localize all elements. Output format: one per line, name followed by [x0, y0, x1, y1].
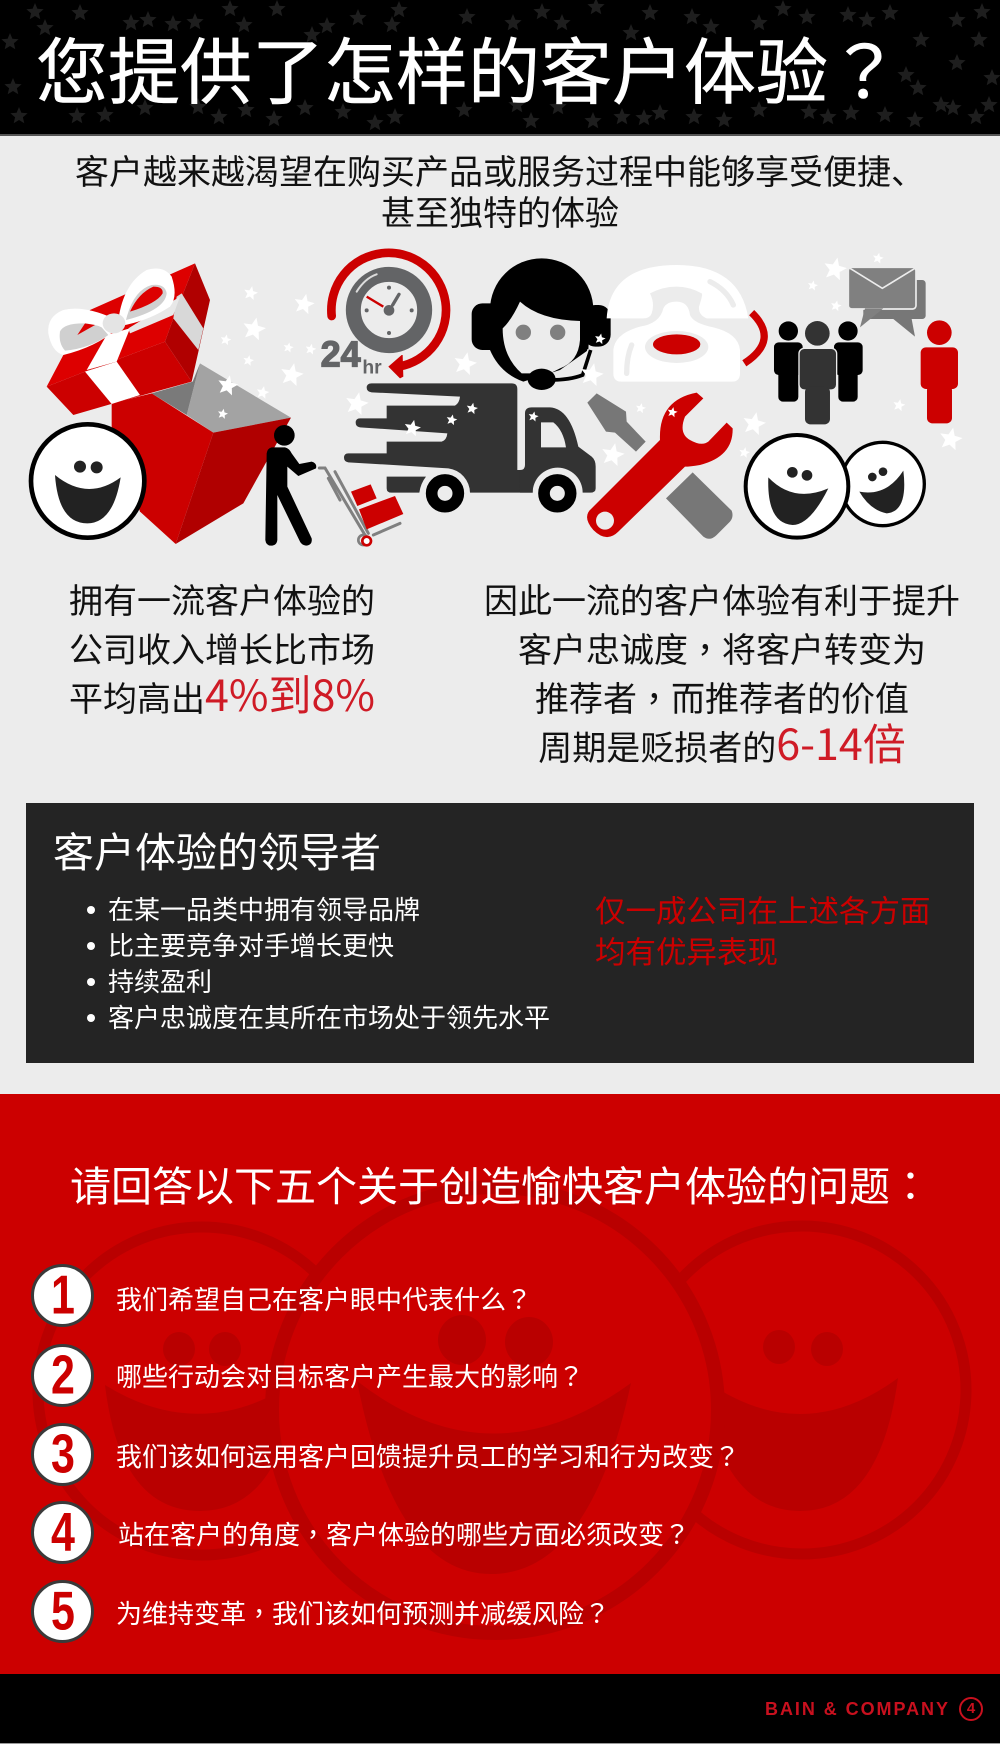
icon: white telephone: [607, 265, 764, 382]
question 5: 为维持变革，我们该如何预测并减缓风险？: [116, 1594, 610, 1631]
text block: loyalty and promoters: 周期是贬损者的6-14倍: [538, 711, 906, 773]
intro text: 甚至独特的体验: [381, 195, 619, 233]
icon: people group: [774, 321, 863, 424]
question 1: 1: [51, 1264, 74, 1326]
question 1: [31, 1264, 532, 1327]
title: 您提供了怎样的客户体验？: [36, 14, 900, 119]
bullet list: 持续盈利: [108, 967, 212, 997]
question 3: 3: [51, 1423, 74, 1485]
text block: loyalty and promoters: 因此一流的客户体验有利于提升: [484, 583, 960, 621]
text block: loyalty and promoters: 客户忠诚度，将客户转变为: [518, 623, 926, 672]
intro text: [75, 154, 925, 233]
panel: customer experience leaders: [26, 803, 974, 1063]
question 5: 5: [51, 1580, 74, 1642]
bullet list: 比主要竞争对手增长更快: [108, 931, 394, 961]
question 1: 我们希望自己在客户眼中代表什么？: [116, 1280, 532, 1317]
question 3: [31, 1423, 740, 1486]
panel: header band: [0, 0, 1000, 136]
heading: leaders: 客户体验的领导者: [53, 830, 381, 876]
question 3: 我们该如何运用客户回馈提升员工的学习和行为改变？: [116, 1437, 740, 1474]
bullet list: 客户忠诚度在其所在市场处于领先水平: [108, 1003, 550, 1033]
question 2: 哪些行动会对目标客户产生最大的影响？: [116, 1357, 584, 1394]
icon: red person: [921, 320, 958, 423]
icon: tools wrench and screwdriver: [587, 393, 733, 539]
text block: revenue growth: 平均高出4%到8%: [69, 662, 375, 724]
callout: only ten percent: [595, 895, 930, 970]
icon: delivery truck: [344, 383, 596, 507]
illustration: customer experience icons: [28, 248, 962, 547]
icon: happy faces right: [746, 435, 924, 538]
logo: Bain & Company: 4: [967, 1700, 975, 1717]
question 5: [31, 1580, 610, 1643]
icon: open gift box: [47, 263, 291, 544]
question 4: 4: [51, 1501, 74, 1563]
icon: 24 hour clock: 24: [321, 334, 361, 375]
icon: 24 hour clock: hr: [362, 357, 382, 378]
intro text: 客户越来越渴望在购买产品或服务过程中能够享受便捷、: [75, 154, 925, 192]
background smiley faces: [32, 1180, 972, 1640]
icon: envelope speech bubbles: [848, 267, 926, 337]
question 2: 2: [51, 1344, 74, 1406]
icon: 24 hour clock: [321, 253, 446, 378]
text block: revenue growth: 公司收入增长比市场: [69, 632, 375, 670]
question 4: 站在客户的角度，客户体验的哪些方面必须改变？: [118, 1515, 690, 1552]
callout: only ten percent: 均有优异表现: [595, 936, 778, 970]
footer band: [0, 1674, 1000, 1744]
bullet list: 在某一品类中拥有领导品牌: [108, 895, 420, 925]
question 4: [31, 1501, 690, 1564]
text block: revenue growth: 拥有一流客户体验的: [69, 583, 375, 621]
heading: five questions: 请回答以下五个关于创造愉快客户体验的问题：: [70, 1153, 931, 1213]
text block: loyalty and promoters: [484, 583, 960, 773]
logo: Bain & Company: BAIN & COMPANY: [765, 1699, 950, 1719]
question 2: [31, 1344, 584, 1407]
panel: five questions: [0, 1094, 1000, 1674]
callout: only ten percent: 仅一成公司在上述各方面: [595, 895, 930, 929]
icon: happy face left: [31, 424, 144, 538]
icon: person with trolley: [265, 425, 403, 546]
bullet list: [87, 895, 550, 1033]
icon: call centre agent with headset: [472, 258, 611, 390]
stars: [216, 252, 964, 467]
text block: loyalty and promoters: 推荐者，而推荐者的价值: [535, 672, 909, 721]
text block: revenue growth: [69, 583, 375, 724]
